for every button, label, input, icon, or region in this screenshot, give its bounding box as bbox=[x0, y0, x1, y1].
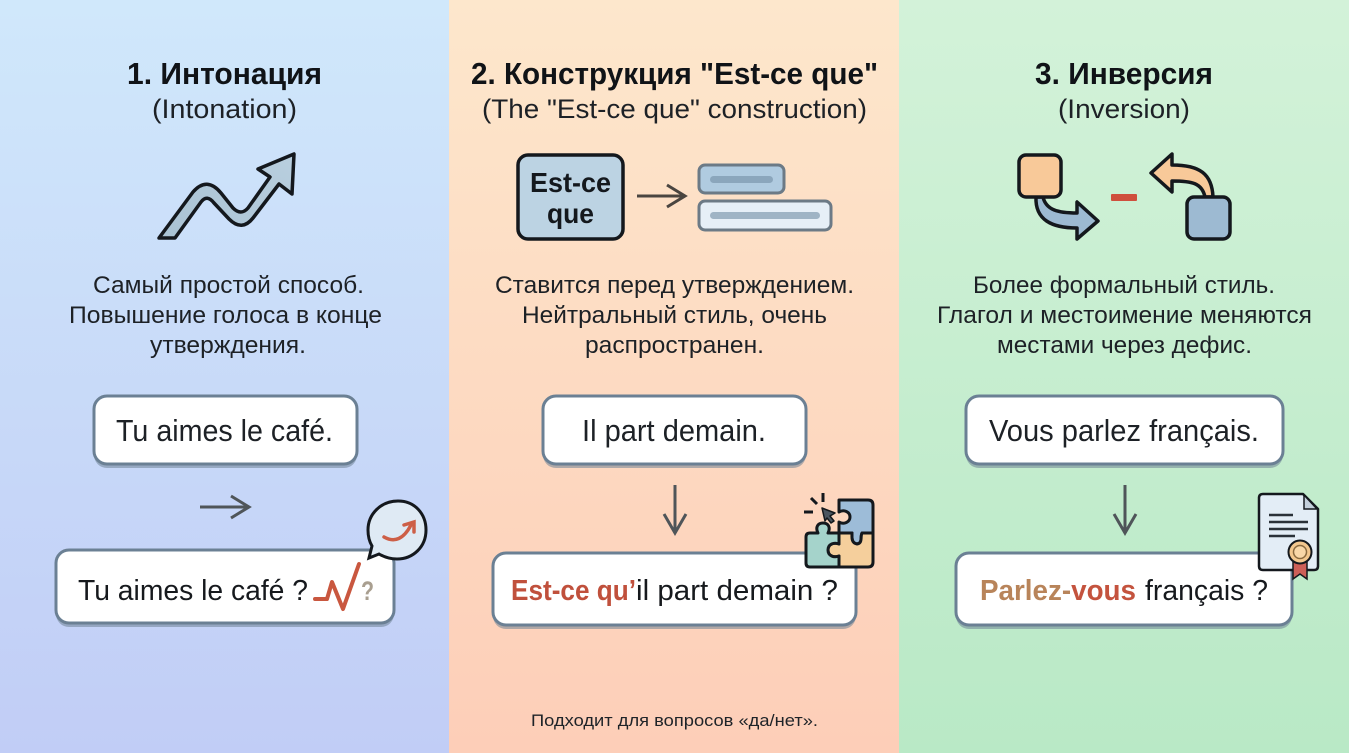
icon: est-ce que block: Est-ce bbox=[530, 167, 611, 198]
text: intonation description: утверждения. bbox=[150, 332, 306, 359]
example box: statement: Vous parlez français. bbox=[989, 414, 1259, 448]
heading: inversion bbox=[1035, 57, 1213, 124]
icon: puzzle with cursor bbox=[804, 493, 873, 567]
example box: inversion question: Parlez-vous bbox=[980, 575, 1136, 607]
panel: inversion bbox=[899, 0, 1349, 753]
example box: statement bbox=[966, 396, 1283, 468]
text: inversion description: Более формальный стиль. bbox=[973, 272, 1275, 299]
text: est-ce que description bbox=[495, 272, 854, 359]
heading: inversion: 3. Инверсия bbox=[1035, 57, 1213, 91]
example box: est-ce que question: il part demain ? bbox=[636, 575, 838, 607]
heading: intonation: (Intonation) bbox=[152, 94, 297, 124]
heading: inversion: (Inversion) bbox=[1058, 94, 1190, 124]
text: intonation description bbox=[69, 272, 382, 359]
arrow: right bbox=[200, 496, 249, 518]
text: intonation description: Самый простой способ. bbox=[93, 272, 364, 299]
example box: est-ce que question: Est-ce qu’ bbox=[511, 575, 636, 607]
example box: statement bbox=[94, 396, 357, 468]
text: inversion description bbox=[937, 272, 1312, 359]
text: est-ce que description: Ставится перед утверждением. bbox=[495, 272, 854, 299]
icon: est-ce que block: que bbox=[547, 198, 594, 229]
example box: statement: Tu aimes le café. bbox=[116, 414, 333, 448]
icon: est-ce que block bbox=[518, 155, 623, 239]
text: inversion description: местами через дефис. bbox=[997, 332, 1252, 359]
panel: est-ce que bbox=[449, 0, 899, 753]
panel: intonation bbox=[0, 0, 449, 753]
icon: rising wavy arrow bbox=[159, 154, 294, 238]
arrow: down bbox=[1114, 485, 1136, 533]
example box: intonation question: Tu aimes le café ? bbox=[78, 575, 308, 607]
icon: certificate document bbox=[1259, 494, 1318, 579]
icon: speech bubble with rising curve bbox=[368, 501, 426, 559]
example box: intonation question bbox=[56, 550, 394, 627]
heading: est-ce que bbox=[471, 57, 878, 124]
example box: inversion question: français ? bbox=[1145, 575, 1268, 607]
heading: intonation bbox=[127, 57, 322, 124]
heading: intonation: 1. Интонация bbox=[127, 57, 322, 91]
icon: hyphen bbox=[1111, 194, 1137, 201]
example box: statement: Il part demain. bbox=[582, 414, 766, 448]
footer note: Подходит для вопросов «да/нет». bbox=[531, 711, 818, 730]
example box: intonation question: ? bbox=[361, 576, 374, 606]
heading: est-ce que: (The "Est-ce que" construction) bbox=[482, 94, 867, 124]
icon: sentence bars bbox=[699, 165, 831, 230]
text: est-ce que description: распространен. bbox=[585, 332, 764, 359]
text: intonation description: Повышение голоса в конце bbox=[69, 302, 382, 329]
arrow: block to sentence bbox=[637, 185, 685, 207]
text: inversion description: Глагол и местоимение меняются bbox=[937, 302, 1312, 329]
heading: est-ce que: 2. Конструкция "Est-ce que" bbox=[471, 57, 878, 91]
example box: est-ce que question bbox=[493, 553, 856, 629]
example box: statement bbox=[543, 396, 806, 468]
icon: inversion swap bbox=[1019, 154, 1230, 239]
arrow: down bbox=[664, 485, 686, 533]
example box: inversion question bbox=[956, 553, 1292, 629]
text: est-ce que description: Нейтральный стиль, очень bbox=[522, 302, 827, 329]
